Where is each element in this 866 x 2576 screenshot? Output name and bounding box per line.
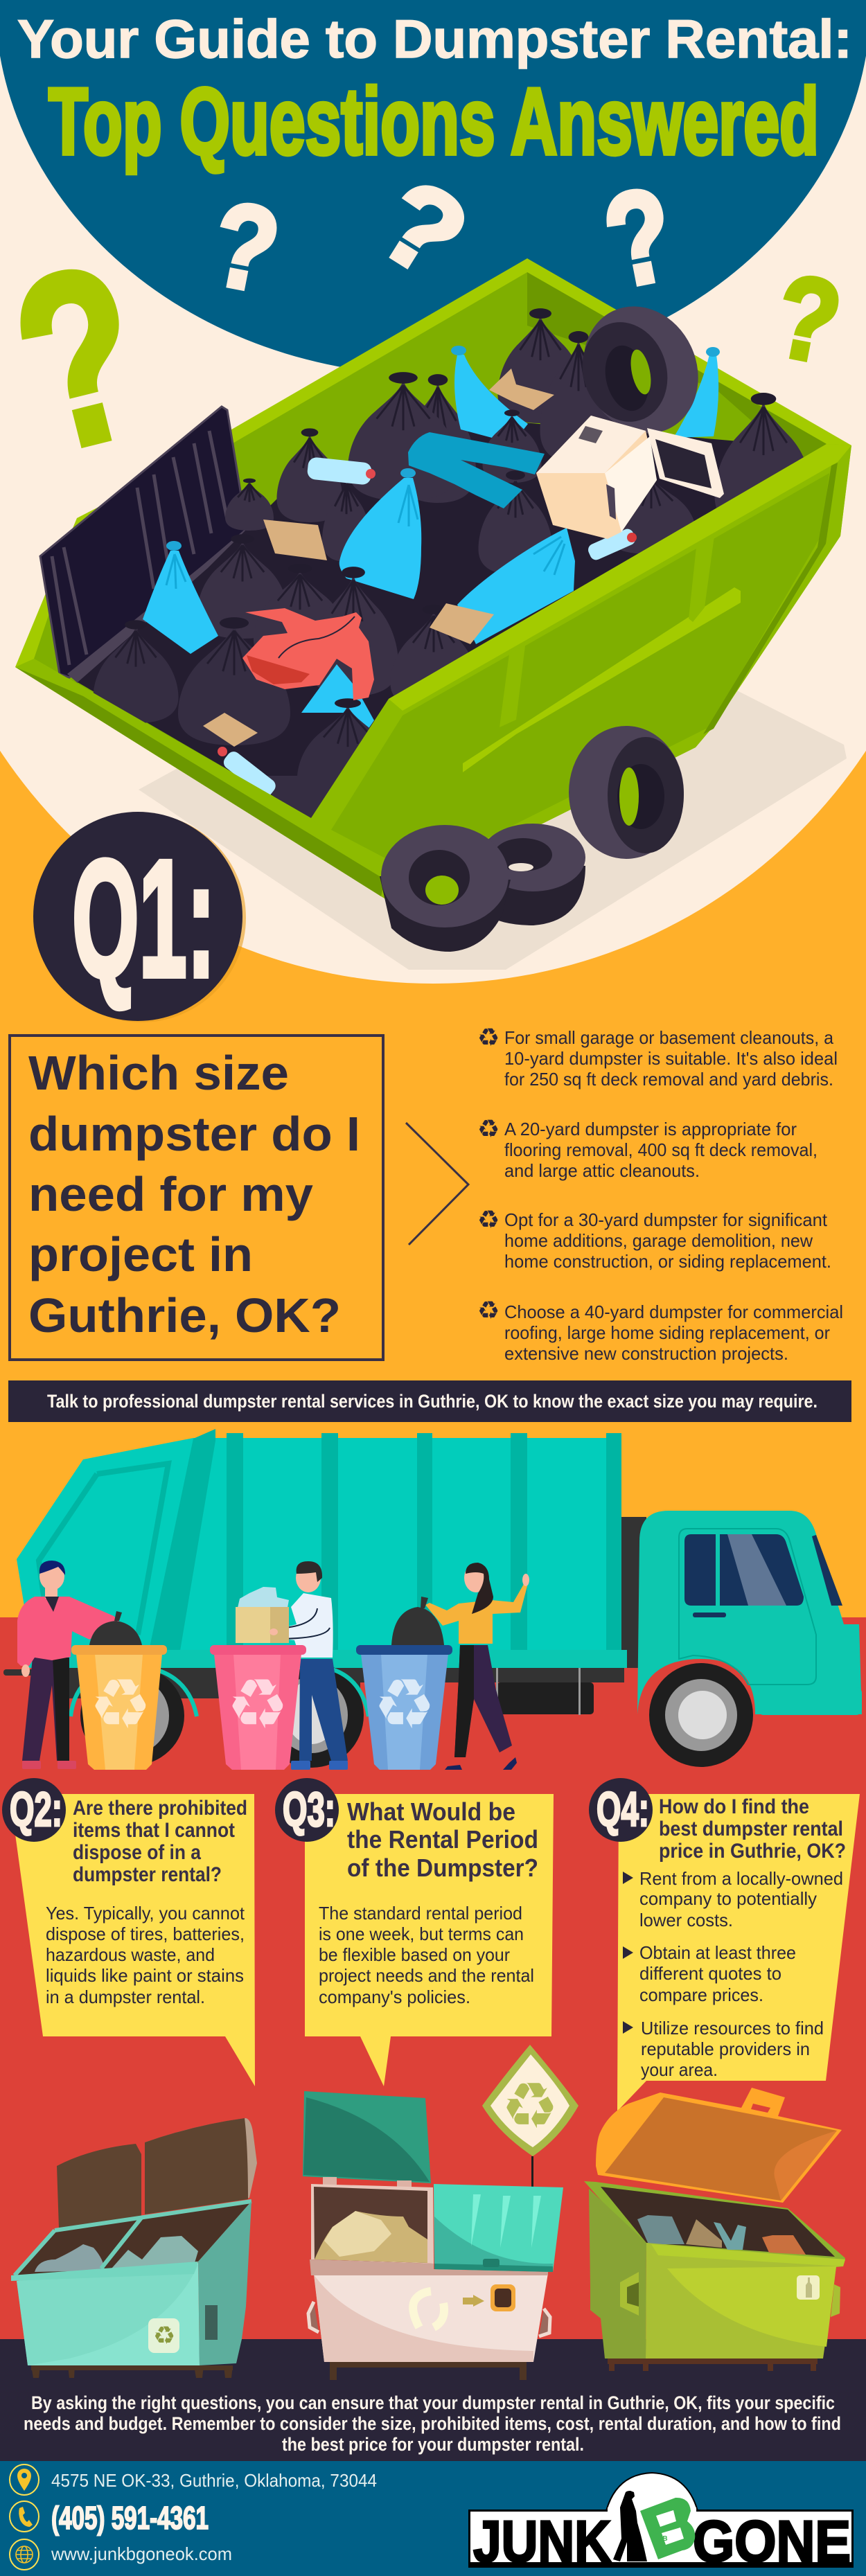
- Q3 heading: [347, 1797, 538, 1882]
- left rim: [15, 659, 389, 896]
- illustration: garbage truck: [3, 1429, 862, 1768]
- side rails: [463, 536, 741, 772]
- panel: Q4 callout: [589, 1778, 860, 2111]
- Q2 heading: Are there prohibited: [73, 1797, 247, 1820]
- Q2 answer: in a dumpster rental.: [46, 1987, 205, 2007]
- water bottles: [218, 456, 637, 799]
- teal lid: [434, 2184, 563, 2272]
- bin: pink: ♻: [227, 1664, 289, 1745]
- Q1 answer bullets: home additions, garage demolition, new: [504, 1230, 813, 1251]
- bin: pink: [210, 1645, 306, 1770]
- decorative question marks: ?: [202, 176, 289, 318]
- bottom tire right: [569, 726, 684, 859]
- trash: [637, 2215, 806, 2255]
- blue title dome: [0, 0, 866, 375]
- decorative question marks: ?: [357, 154, 489, 304]
- Q4 answer bullets: company to potentially: [639, 1888, 817, 1909]
- Q4 heading: best dumpster rental: [659, 1818, 843, 1840]
- Q1 answer bullets: for 250 sq ft deck removal and yard debris.: [504, 1069, 833, 1090]
- left side: [589, 2189, 646, 2359]
- Q1 answer bullets: home construction, or siding replacement.: [504, 1251, 831, 1272]
- blue bag left: [143, 541, 218, 654]
- handles: [308, 2302, 319, 2332]
- illustration: cream dumpster: [303, 2091, 563, 2380]
- label: [797, 2275, 820, 2300]
- side: [198, 2201, 251, 2365]
- Q1 answer bullets: For small garage or basement cleanouts, a: [504, 1027, 834, 1048]
- illustration: recycling sign: [482, 2045, 578, 2187]
- Q3 answer: [319, 1903, 534, 2007]
- Q1 question box: Guthrie, OK?: [28, 1288, 341, 1342]
- front wheel: [649, 1663, 753, 1767]
- title: [17, 8, 852, 174]
- advice banner: [8, 1380, 851, 1422]
- bin: blue: ♻: [373, 1664, 436, 1745]
- body: [314, 2273, 548, 2362]
- Q1 question box: dumpster do I: [28, 1107, 360, 1161]
- tire in dumpster: [563, 287, 718, 452]
- Q4 answer bullets: compare prices.: [639, 1984, 763, 2005]
- Q1 answer bullets: and large attic cleanouts.: [504, 1160, 700, 1181]
- arrow: chevron: [406, 1123, 468, 1245]
- dumpster shell behind trash: [15, 258, 851, 900]
- front: [646, 2243, 845, 2359]
- Q1 badge: [33, 812, 246, 1022]
- footer: website: www.junkbgoneok.com: [51, 2543, 232, 2564]
- decorative question marks: [0, 154, 851, 504]
- Q4 answer bullets: [623, 1868, 843, 2080]
- footer: address: 4575 NE OK-33, Guthrie, Oklahoma, 73044: [51, 2470, 377, 2491]
- Q1 question box: need for my: [28, 1167, 313, 1221]
- person 3: [425, 1563, 529, 1770]
- Q4 heading: [659, 1795, 846, 1863]
- logo figure: [613, 2491, 647, 2561]
- person 1: [17, 1561, 119, 1769]
- title: Your Guide to Dumpster Rental:: [17, 8, 852, 69]
- middle black bags: [197, 331, 812, 665]
- Q3 answer: company's policies.: [319, 1987, 470, 2007]
- Q1 answer bullets: ♻: [477, 1206, 500, 1234]
- decorative question marks: ?: [766, 250, 851, 389]
- lower black bags: [308, 567, 477, 709]
- blue bag middle: [339, 468, 421, 599]
- Q3 heading: the Rental Period: [347, 1825, 538, 1854]
- legs: [608, 2359, 818, 2371]
- legs: [330, 2362, 527, 2380]
- Q4 answer bullets: reputable providers in: [641, 2038, 810, 2059]
- footer: phone: [10, 2500, 209, 2536]
- Q2 answer: dispose of tires, batteries,: [46, 1924, 245, 1944]
- cab window: [684, 1534, 804, 1606]
- legs: [31, 2365, 233, 2378]
- rear wheels: [80, 1666, 184, 1766]
- Q1 question box: Which size: [28, 1046, 289, 1100]
- Q2 answer: hazardous waste, and: [46, 1944, 215, 1965]
- Q1 answer bullets: ♻: [477, 1024, 500, 1052]
- logo green B: [640, 2498, 695, 2559]
- illustration: green dumpster full of trash: [15, 258, 851, 952]
- illustration: recycling sign: ♻: [502, 2069, 558, 2143]
- blue bag behind cardboard: [451, 346, 528, 443]
- Q4 answer bullets: lower costs.: [639, 1910, 733, 1930]
- blue bag right of tire: [673, 347, 720, 438]
- panel: Q2 callout: [2, 1778, 255, 2086]
- truck body: [17, 1438, 621, 1651]
- Q3 heading: What Would be: [347, 1797, 515, 1826]
- Q1 answer bullets: flooring removal, 400 sq ft deck removal,: [504, 1139, 818, 1160]
- front: [17, 2263, 200, 2365]
- closing paragraph: [24, 2392, 841, 2455]
- Q2 heading: dumpster rental?: [73, 1863, 222, 1886]
- Q1 question box: project in: [28, 1227, 253, 1281]
- logo: Junk B Gone: [468, 2473, 854, 2574]
- Q1 answer bullets: extensive new construction projects.: [504, 1343, 788, 1364]
- Q4 answer bullets: your area.: [641, 2059, 718, 2080]
- Q1 badge: Q1:: [72, 826, 215, 1011]
- back black bags: [225, 308, 583, 562]
- red shirt: [242, 608, 374, 700]
- person 2: [236, 1561, 348, 1770]
- logo: Junk B Gone: JUNK: [473, 2509, 611, 2574]
- Q4 answer bullets: Rent from a locally-owned: [639, 1868, 843, 1889]
- Q2 badge: Q2:: [10, 1782, 62, 1836]
- orange lid: [596, 2088, 842, 2203]
- blue bag beneath shirt: [301, 664, 374, 743]
- footer: address: [10, 2464, 377, 2495]
- bin: blue: [356, 1597, 452, 1770]
- Q2 heading: [73, 1797, 247, 1886]
- Q4 answer bullets: different quotes to: [639, 1963, 781, 1984]
- front black bag: [258, 698, 398, 818]
- Q4 badge: [589, 1778, 653, 1842]
- Q2 answer: Yes. Typically, you cannot: [46, 1903, 245, 1924]
- Q2 answer: liquids like paint or stains: [46, 1965, 244, 1986]
- bin: orange: [71, 1611, 167, 1770]
- dark trash mass: [78, 416, 804, 818]
- Q1 answer bullets: Opt for a 30-yard dumpster for significant: [504, 1209, 828, 1230]
- Q3 answer: be flexible based on your: [319, 1944, 510, 1965]
- interior: [15, 2201, 251, 2275]
- Q3 answer: is one week, but terms can: [319, 1924, 524, 1944]
- Q1 answer bullets: A 20-yard dumpster is appropriate for: [504, 1119, 797, 1139]
- cardboard scraps: [203, 368, 554, 747]
- Q3 badge: [275, 1778, 339, 1842]
- decorative question marks: ?: [594, 160, 684, 316]
- Q1 answer bullets: Choose a 40-yard dumpster for commercial: [504, 1302, 843, 1322]
- logo: Junk B Gone: GONE: [693, 2509, 851, 2574]
- Q3 answer: project needs and the rental: [319, 1965, 534, 1986]
- compartment: [311, 2184, 434, 2264]
- bottom tire front: [380, 825, 511, 952]
- slot: [491, 2284, 515, 2311]
- logo green B: B: [662, 2535, 668, 2543]
- ground shadow under dumpster: [139, 689, 847, 970]
- bin: orange: ♻: [89, 1664, 152, 1745]
- teal shirt: [408, 432, 545, 508]
- label: [148, 2318, 179, 2353]
- circular arrows mark: [413, 2291, 444, 2327]
- bottom tire back: [480, 824, 585, 925]
- Q1 answer bullets: roofing, large home siding replacement, or: [504, 1322, 830, 1343]
- Q1 answer bullets: [477, 1024, 843, 1364]
- footer: phone: (405) 591-4361: [51, 2500, 209, 2536]
- arrow to slot: [463, 2295, 484, 2307]
- Q3 badge: Q3:: [283, 1782, 335, 1836]
- interior door with grille: [40, 407, 247, 691]
- Q4 heading: How do I find the: [659, 1795, 809, 1818]
- lids: [57, 2144, 141, 2228]
- truck cab: [637, 1511, 862, 1714]
- Q2 heading: items that I cannot: [73, 1819, 235, 1842]
- Q1 answer bullets: ♻: [477, 1297, 500, 1325]
- Q4 heading: price in Guthrie, OK?: [659, 1840, 846, 1863]
- Q1 answer bullets: ♻: [477, 1115, 500, 1144]
- box with bottles: [238, 1587, 289, 1608]
- footer: website: [10, 2539, 232, 2570]
- Q1 question box: [10, 1036, 383, 1360]
- Q3 heading: of the Dumpster?: [347, 1854, 538, 1882]
- Q2 answer: [46, 1903, 245, 2007]
- illustration: people with recycling bins: [17, 1561, 529, 1770]
- panel: Q3 callout: [275, 1778, 554, 2086]
- Q4 answer bullets: Utilize resources to find: [641, 2018, 824, 2038]
- Q4 badge: Q4:: [597, 1782, 649, 1836]
- cream circle behind dumpster: [0, 0, 866, 984]
- rim and interior: [584, 2181, 845, 2266]
- closing paragraph: the best price for your dumpster rental.: [282, 2434, 584, 2455]
- blue bag lower right: [457, 528, 575, 644]
- microwave appliance: [536, 416, 724, 539]
- illustration: teal dumpster: [11, 2118, 257, 2378]
- Q2 badge: [2, 1778, 66, 1842]
- truck chassis: [3, 1669, 73, 1676]
- illustration: teal dumpster: ♻: [153, 2322, 175, 2350]
- Q1 answer bullets: 10-yard dumpster is suitable. It's also ideal: [504, 1048, 838, 1069]
- green lid: [303, 2091, 431, 2183]
- Q4 answer bullets: Obtain at least three: [639, 1942, 796, 1963]
- illustration: green dumpster with orange lid: [584, 2088, 845, 2371]
- Q3 answer: The standard rental period: [319, 1903, 522, 1924]
- Q2 heading: dispose of in a: [73, 1841, 201, 1864]
- front walls: [311, 444, 851, 900]
